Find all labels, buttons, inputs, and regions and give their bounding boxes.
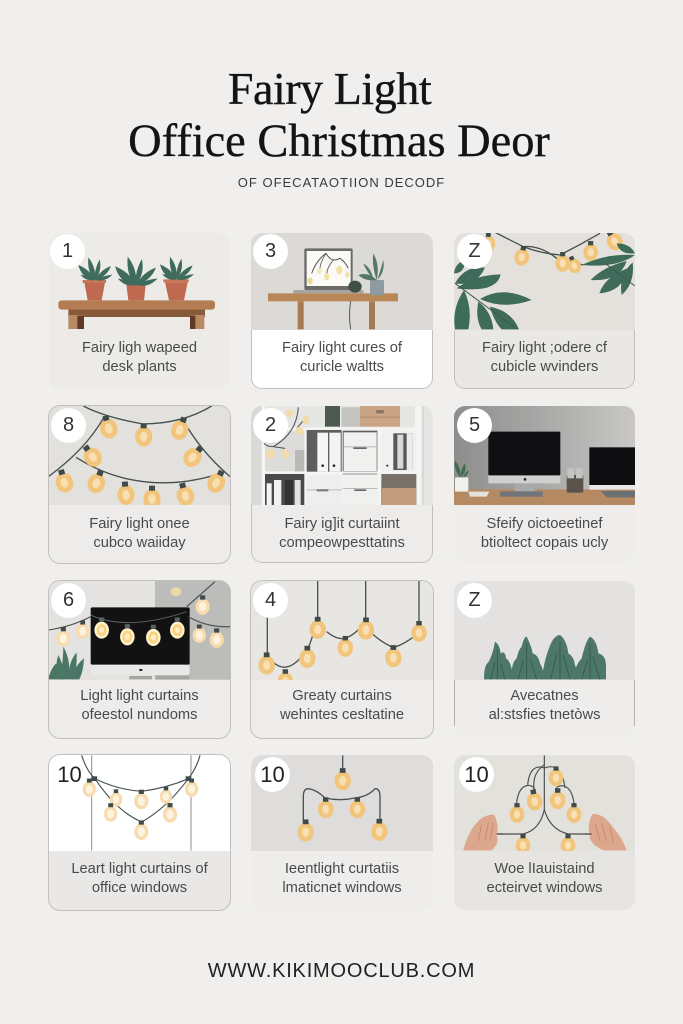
caption: office windows [92, 880, 187, 896]
caption [454, 680, 635, 738]
illustration: string lights [49, 406, 230, 505]
number badge: 5 [469, 414, 480, 436]
panel: card 12 hands and bulbs [454, 755, 635, 910]
caption: al:stsfies tnetòws [489, 707, 600, 723]
title [128, 63, 550, 167]
illustration: lights across white window [49, 755, 230, 851]
caption [82, 340, 197, 375]
panel: card 2 laptop on desk [251, 233, 433, 389]
panel: card 9 green plants [454, 581, 635, 738]
right edge line [634, 680, 635, 726]
panel: card 8 hanging lights [251, 581, 433, 738]
illustration: leafy plants [454, 581, 635, 680]
caption [89, 516, 190, 551]
number badge: 10 [464, 762, 489, 787]
illustration: hands holding branching lights [463, 755, 627, 851]
number badge: 3 [265, 240, 276, 262]
illustration: desk with potted plants [58, 256, 215, 329]
illustration: garland with leaves [454, 233, 635, 330]
caption: Fairy light ;odere cf [482, 340, 607, 356]
caption: cubicle wvinders [491, 359, 598, 375]
illustration: monitor and glowing lights [49, 581, 230, 680]
caption [251, 330, 433, 389]
caption: wehintes cesltatine [280, 707, 404, 723]
panel: card 6 desk with monitors [454, 406, 635, 563]
illustration: looped string of bulbs [251, 755, 433, 851]
caption [454, 330, 635, 389]
number badge [459, 757, 494, 792]
number badge: 1 [62, 240, 73, 262]
caption [454, 505, 635, 563]
title: Fairy Light [228, 63, 431, 114]
caption [71, 861, 208, 896]
illustration: hanging bulbs on wires [258, 581, 427, 680]
number badge [253, 583, 288, 618]
caption: Light light curtains [80, 688, 199, 704]
title: Office Christmas Deor [128, 116, 550, 167]
caption: Greaty curtains [292, 688, 392, 704]
number badge [253, 408, 288, 443]
left edge line [454, 680, 455, 726]
number badge: Z [468, 240, 481, 262]
caption: Woe lIauistaind [494, 861, 595, 877]
caption: Leart light curtains of [71, 861, 208, 877]
caption [487, 861, 602, 896]
caption [251, 851, 433, 910]
caption: ofeestol nundoms [82, 707, 197, 723]
caption: curicle waltts [300, 359, 384, 375]
caption: lmaticnet windows [282, 880, 402, 896]
number badge: 4 [265, 589, 276, 611]
caption: Ieentlight curtatiis [285, 861, 399, 877]
caption [80, 688, 199, 723]
number badge: 2 [265, 414, 276, 436]
number badge [255, 757, 290, 792]
panel: card 10 window lights [49, 755, 230, 910]
number badge: 10 [57, 762, 82, 787]
number badge [51, 583, 86, 618]
number badge [457, 583, 492, 618]
number badge [457, 408, 492, 443]
illustration: laptop and plant [268, 248, 398, 330]
number badge: 10 [260, 762, 285, 787]
caption: Fairy light onee [89, 516, 190, 532]
panel: card 3 leaves and lights [454, 233, 635, 389]
caption: Sfeify oictoeetinef [487, 516, 602, 532]
illustration: white shelves and boxes [251, 406, 424, 505]
panel: card 11 bulbs on grey [251, 755, 433, 910]
caption [280, 688, 404, 723]
caption: compeowpesttatins [279, 535, 405, 551]
number badge [457, 234, 492, 269]
caption: cubco waiiday [93, 535, 186, 551]
caption: Fairy ig]it curtaiint [284, 516, 400, 532]
caption: desk plants [102, 359, 177, 375]
number badge: Z [468, 589, 481, 611]
number badge [253, 234, 288, 269]
illustration: monitors on wooden desk [454, 406, 635, 505]
footer url: WWW.KIKIMOOCLUB.COM [208, 960, 475, 982]
caption: Fairy ligh wapeed [82, 340, 197, 356]
caption: btioltect copais ucly [481, 535, 608, 551]
panel: card 4 string lights swag [49, 406, 230, 563]
number badge: 8 [63, 414, 74, 436]
panel: card 7 monitor with lights [49, 581, 230, 738]
panel: card 5 shelving [251, 406, 433, 563]
number badge: 6 [63, 589, 74, 611]
caption: Fairy light cures of [282, 340, 402, 356]
panel: card 1 desk plants [49, 233, 230, 389]
caption: Avecatnes [510, 688, 579, 704]
caption [251, 505, 433, 563]
number badge [50, 234, 85, 269]
caption: ecteirvet windows [487, 880, 602, 896]
subtitle: OF OFECATAOTIION DECODF [238, 175, 445, 190]
number badge [51, 408, 86, 443]
